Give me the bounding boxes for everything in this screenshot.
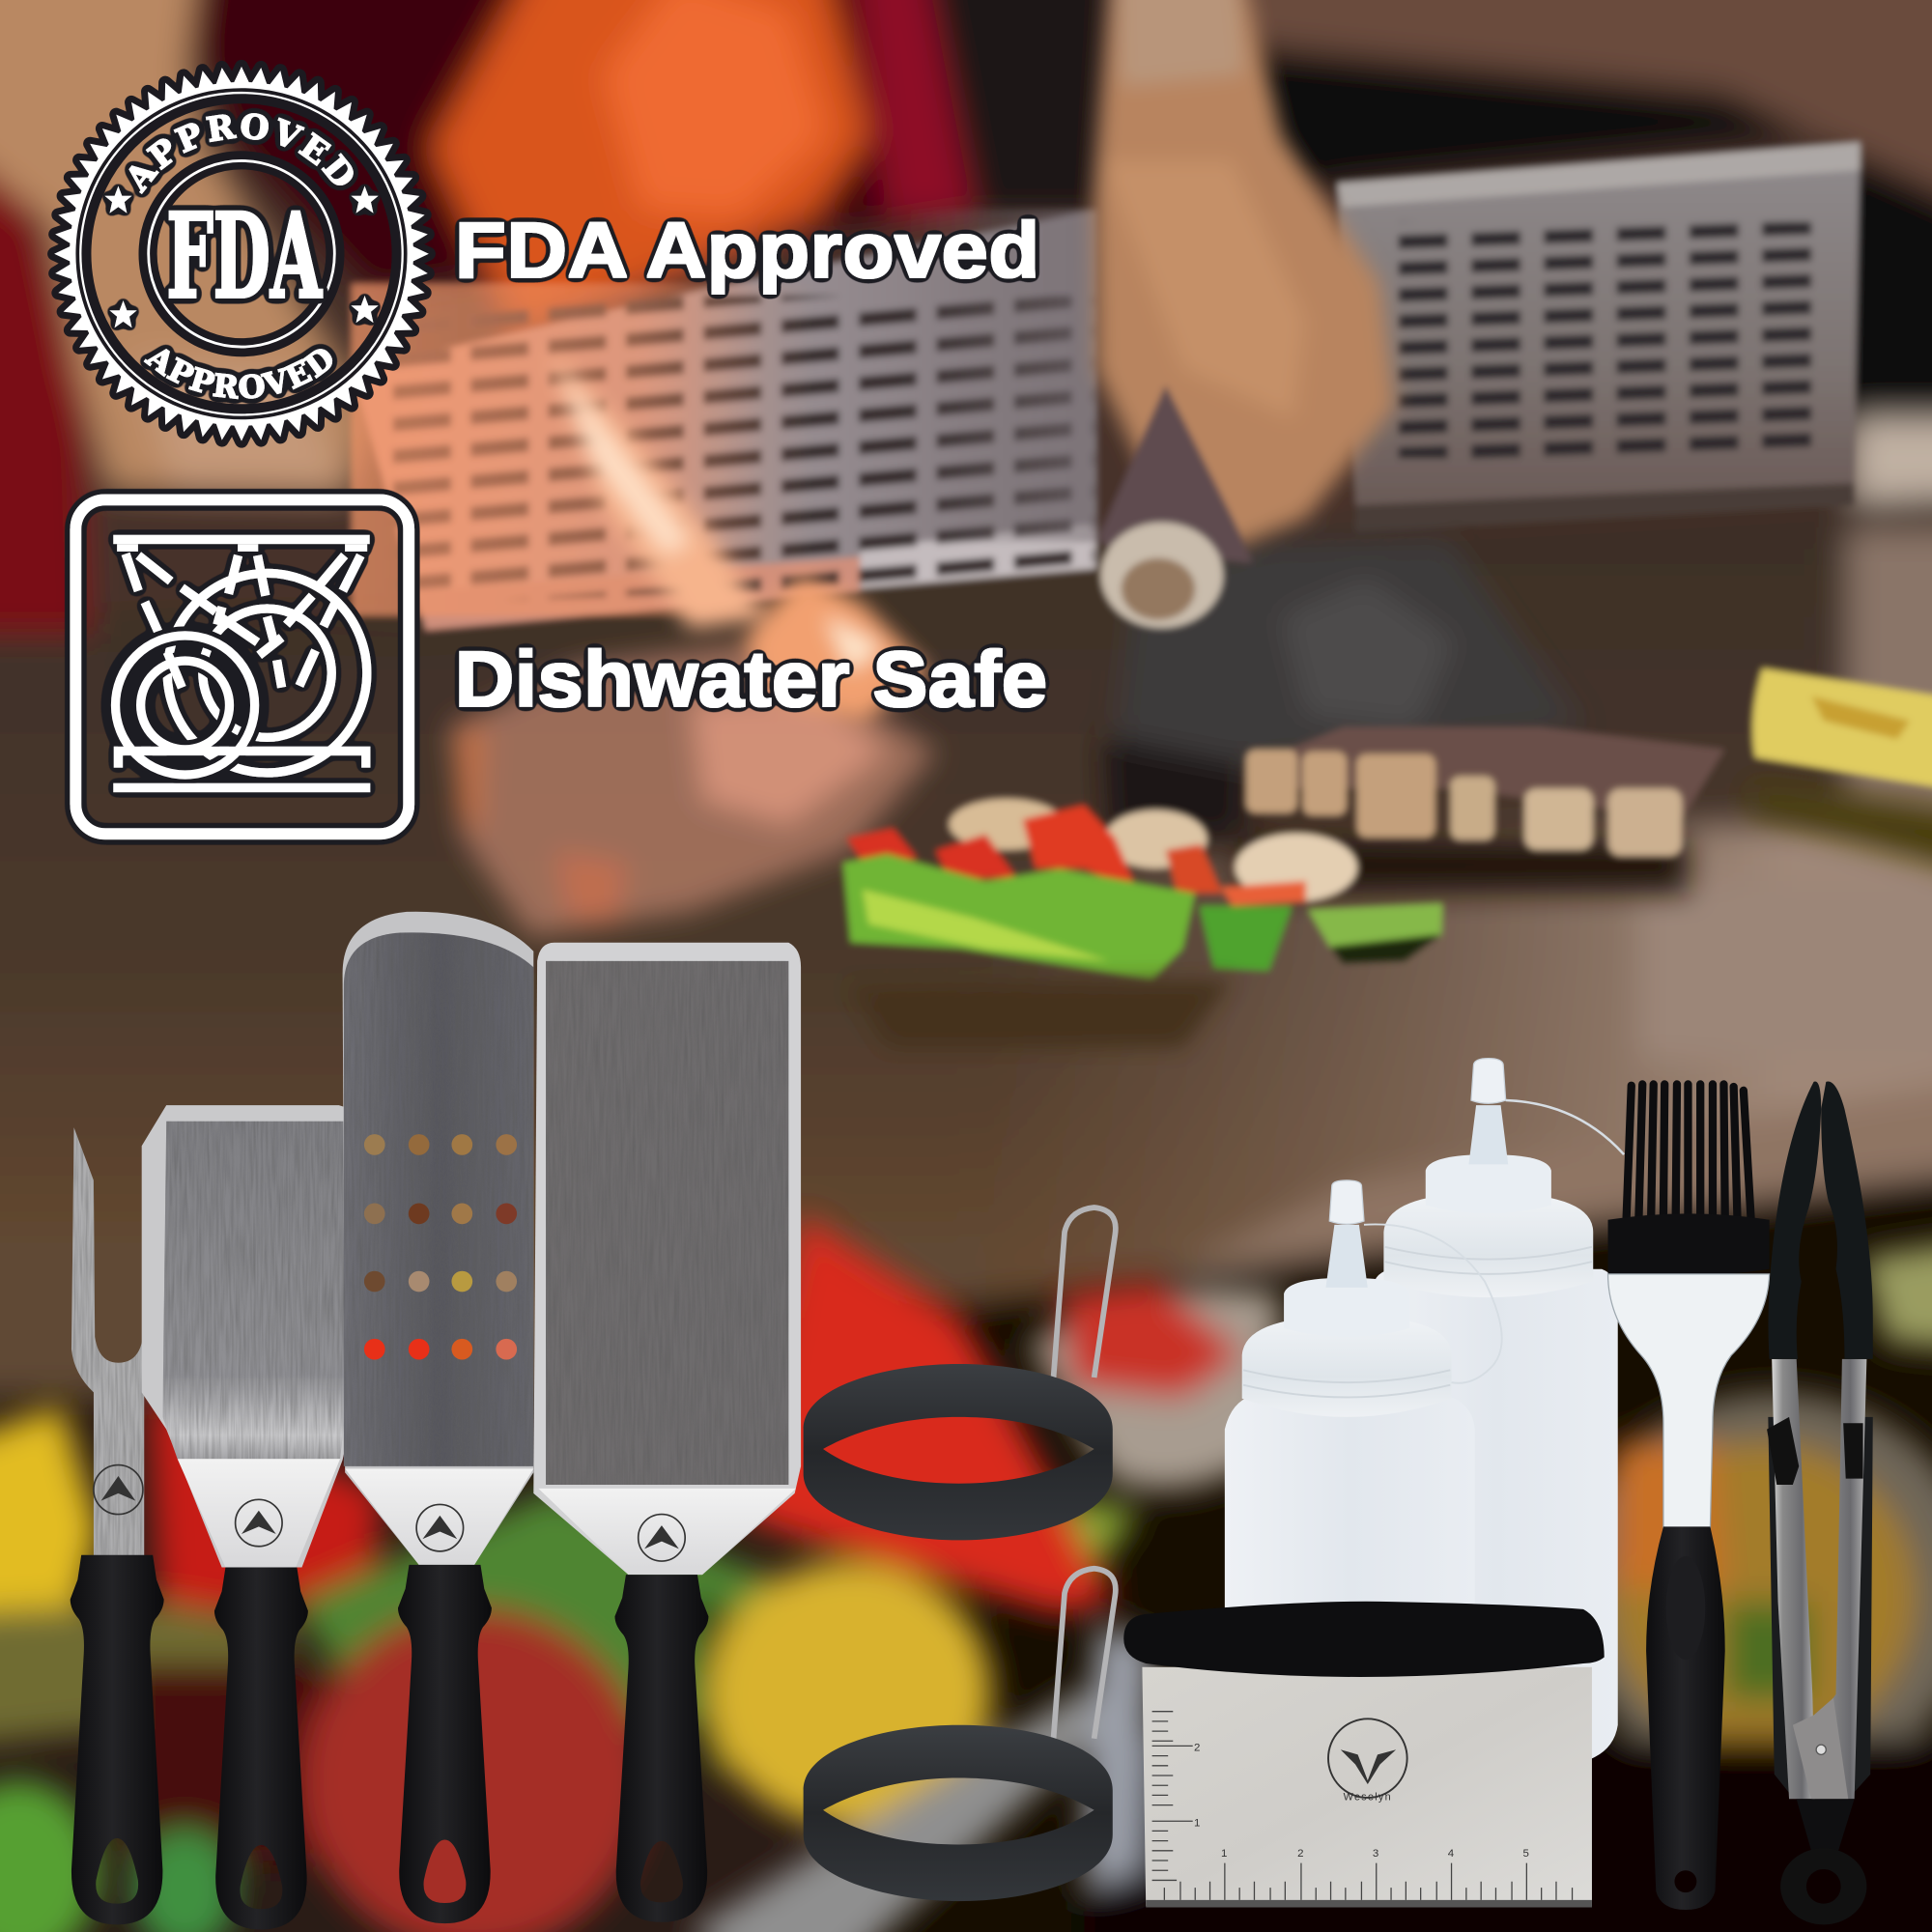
seal text: FDA: FDA (166, 186, 323, 325)
tongs silicone heads (1768, 1081, 1821, 1359)
egg ring top (804, 1208, 1116, 1540)
bottle in hand (1097, 385, 1253, 563)
clear head (1608, 1274, 1770, 1528)
griddle food (1246, 727, 1725, 819)
Weselyn logo: Weselyn (1344, 1792, 1392, 1804)
foreground vegetables (0, 1213, 1932, 1932)
carving fork (71, 1127, 164, 1924)
label: FDA Approved: FDA Approved (455, 207, 1040, 295)
ruler numbers: 2 (1194, 1742, 1200, 1753)
seal text: top APPROVED: APPROVED (124, 108, 359, 200)
bench scraper (1123, 1602, 1605, 1907)
ruler numbers: 4 (1448, 1848, 1455, 1860)
squeeze bottle front (1225, 1180, 1502, 1614)
label: Dishwater Safe: Dishwater Safe (455, 636, 1047, 724)
seal scalloped rim (37, 49, 446, 459)
lower flames (450, 640, 936, 936)
ruler ticks (1152, 1712, 1573, 1900)
ruler numbers (1194, 1743, 1529, 1860)
seal lettering and stars (102, 108, 381, 404)
tongs black side strips (1768, 1417, 1873, 1799)
ruler numbers: 2 (1297, 1848, 1304, 1860)
chef hand (1094, 0, 1395, 549)
FDA approved seal badge (47, 60, 436, 448)
egg ring bottom (804, 1569, 1116, 1901)
squeeze bottle back (1373, 1059, 1624, 1759)
ruler numbers: 5 (1523, 1848, 1529, 1860)
ruler numbers: 1 (1194, 1817, 1200, 1829)
tongs (1767, 1081, 1873, 1924)
seal inner ring (148, 160, 335, 348)
bristles (1627, 1084, 1750, 1217)
perforations (364, 1134, 517, 1360)
griddle shadow patches (1104, 727, 1244, 838)
chef arm and shirt (0, 148, 89, 635)
ruler numbers: 1 (1221, 1848, 1227, 1860)
bowl of tomatoes (1029, 1288, 1282, 1490)
Weselyn logo (1328, 1719, 1407, 1804)
griddle top (0, 493, 1932, 1343)
short spatula (142, 1105, 355, 1929)
perforated spatula (343, 912, 533, 1923)
griddle vents (352, 142, 1861, 631)
seal text: bottom APPROVED: APPROVED (139, 344, 338, 404)
wide spatula (533, 943, 801, 1922)
central flame (550, 352, 766, 629)
basting brush (1608, 1084, 1770, 1910)
seal stars (104, 186, 379, 327)
ruler numbers: 3 (1373, 1848, 1378, 1860)
tongs clips (1767, 1417, 1863, 1485)
plate of food at right (1565, 1392, 1932, 1786)
upper flame (431, 0, 868, 332)
dishwasher safe icon (75, 499, 409, 834)
tongs steel arms (1772, 1359, 1815, 1799)
